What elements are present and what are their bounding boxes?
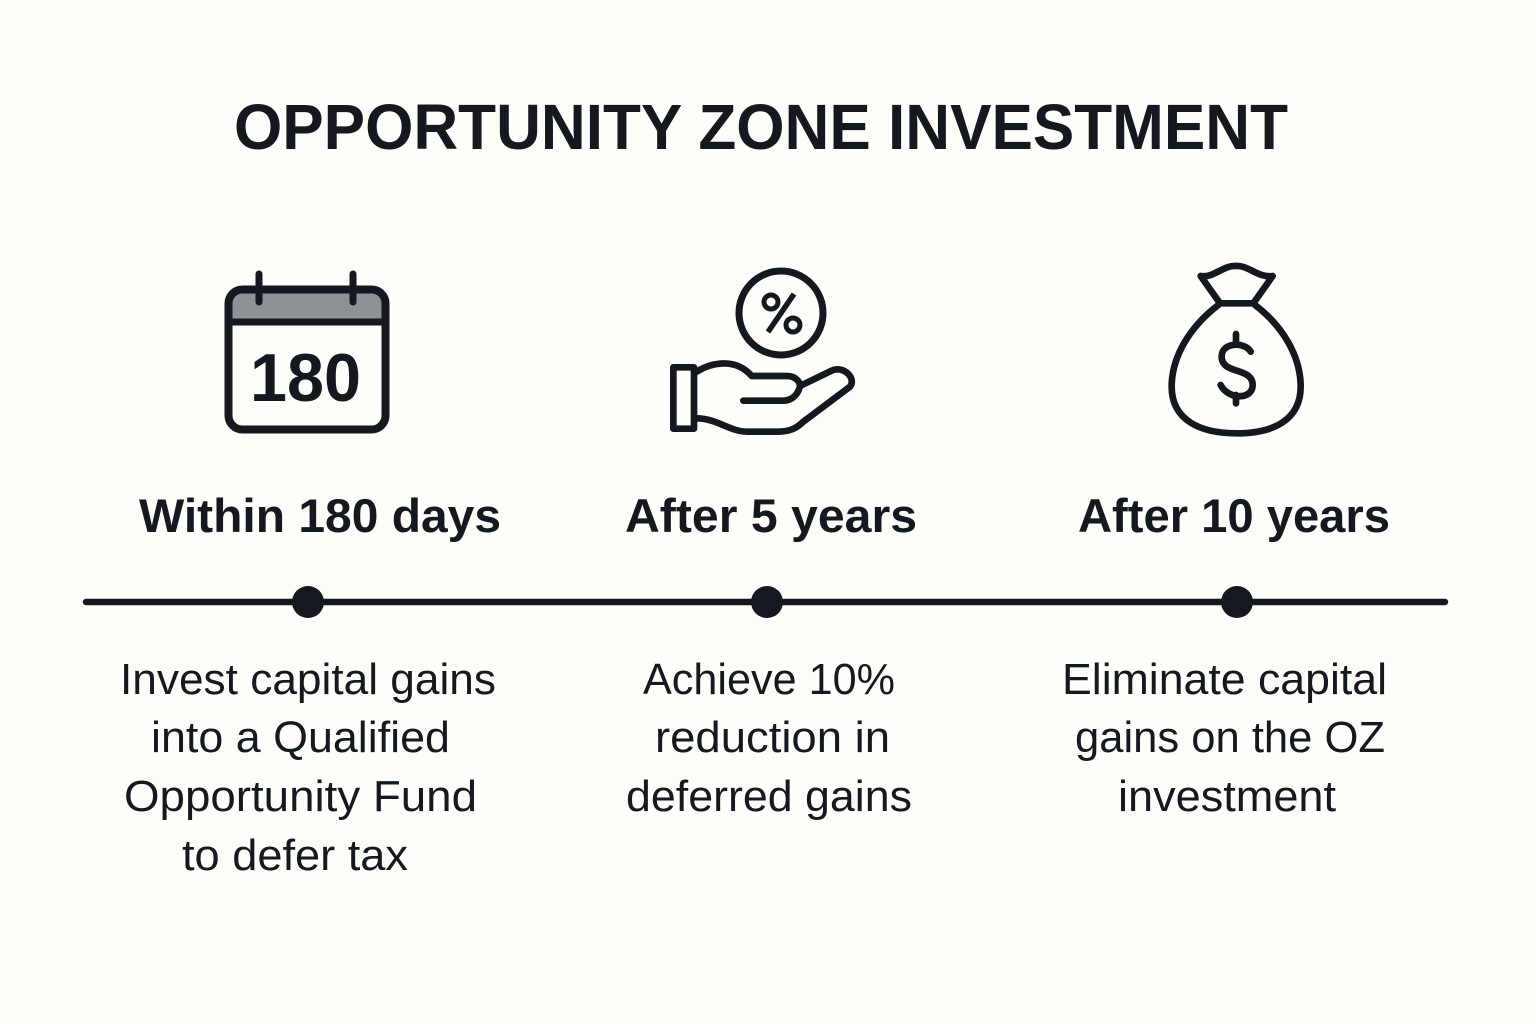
text block: within 180 days description: into a Qualified <box>151 713 450 762</box>
timeline <box>86 586 1445 618</box>
text block: after 5 years description <box>626 655 912 821</box>
icon: calendar 180 days <box>228 274 386 430</box>
heading: within 180 days: Within 180 days <box>139 489 501 542</box>
text block: after 5 years description: deferred gains <box>626 772 912 821</box>
text block: within 180 days description: Invest capital gains <box>120 655 496 704</box>
heading: after 5 years: After 5 years <box>625 489 917 542</box>
icon: money bag <box>1172 266 1301 433</box>
text block: after 5 years description: Achieve 10% <box>643 655 895 704</box>
text block: after 10 years description: Eliminate capital <box>1062 655 1387 704</box>
icon: hand with percent coin <box>673 271 852 432</box>
text block: after 10 years description: gains on the OZ <box>1075 713 1385 762</box>
text block: within 180 days description <box>120 655 496 880</box>
icon: calendar 180 days: 180 <box>250 340 361 416</box>
text block: after 10 years description <box>1062 655 1387 821</box>
text block: after 10 years description: investment <box>1118 772 1336 821</box>
text block: after 5 years description: reduction in <box>655 713 890 762</box>
text block: within 180 days description: Opportunity Fund <box>124 772 477 821</box>
title: OPPORTUNITY ZONE INVESTMENT <box>234 91 1288 163</box>
heading: after 10 years: After 10 years <box>1078 489 1390 542</box>
text block: within 180 days description: to defer tax <box>182 831 408 880</box>
